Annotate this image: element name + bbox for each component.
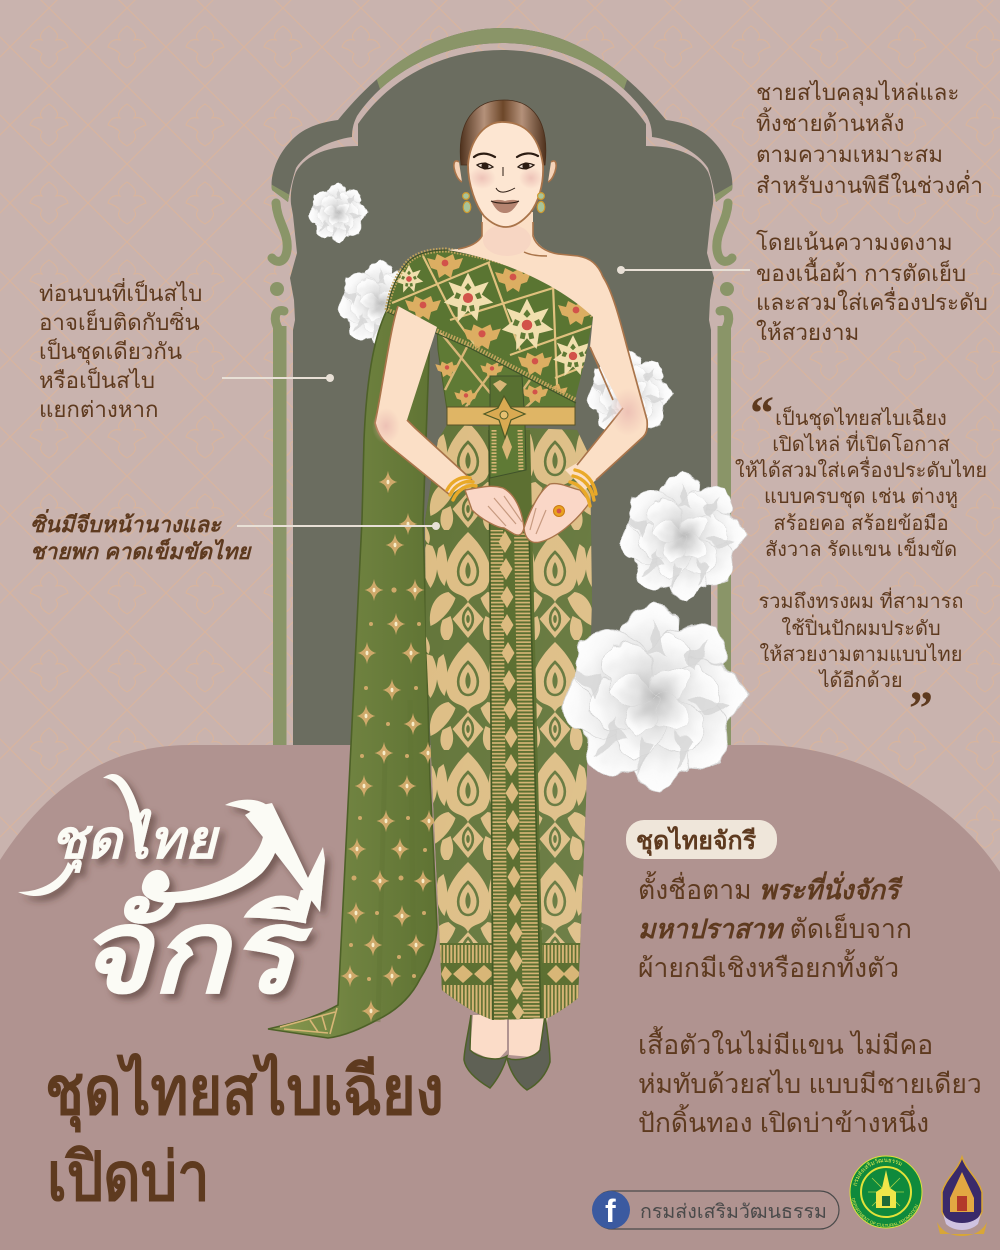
text: description: เสื้อตัวในไม่มีแขน ไม่มีคอ bbox=[638, 1026, 933, 1060]
heading: brown title bbox=[45, 1052, 444, 1215]
flower: right large bbox=[556, 604, 748, 793]
quote: ได้อีกด้วย bbox=[817, 669, 903, 692]
quote: เปิดไหล่ ที่เปิดโอกาส bbox=[772, 430, 950, 456]
lips bbox=[491, 200, 519, 213]
left arm bbox=[372, 306, 472, 495]
cape drape bbox=[268, 310, 437, 1038]
logo: royal emblem bbox=[937, 1157, 987, 1236]
text: right top callout: ทิ้งชายด้านหลัง bbox=[756, 107, 904, 136]
callout lines bbox=[222, 266, 750, 530]
text: left lower callout bbox=[30, 508, 252, 564]
legs and shoes bbox=[464, 1015, 550, 1090]
flower: right middle bbox=[616, 473, 747, 602]
sash knot panel bbox=[489, 425, 526, 478]
text: right second callout: และสวมใส่เครื่องประดับ bbox=[756, 286, 988, 315]
text: description: ปักดิ้นทอง เปิดบ่าข้างหนึ่ง bbox=[638, 1104, 929, 1138]
quote: ใช้ปิ่นปักผมประดับ bbox=[781, 614, 941, 640]
text: left upper callout bbox=[39, 278, 202, 422]
quote: สังวาล รัดแขน เข็มขัด bbox=[765, 536, 957, 561]
text: right top callout: สำหรับงานพิธีในช่วงค่ำ bbox=[756, 169, 983, 198]
text: description: ห่มทับด้วยสไบ แบบมีชายเดียว bbox=[638, 1069, 982, 1099]
text: left upper callout: แยกต่างหาก bbox=[39, 397, 159, 422]
right arm bbox=[565, 277, 647, 490]
text: left lower callout: ซิ่นมีจีบหน้านางและ bbox=[30, 508, 222, 537]
bodice bbox=[435, 327, 575, 410]
hands bbox=[465, 484, 590, 542]
cape stars bbox=[341, 471, 438, 1022]
quote: ให้สวยงามตามแบบไทย bbox=[760, 643, 962, 666]
text: description bbox=[638, 871, 982, 1138]
text: left upper callout: เป็นชุดเดียวกัน bbox=[39, 337, 182, 365]
title: script bbox=[18, 774, 325, 1018]
figure: woman in Thai dress bbox=[268, 100, 647, 1090]
text: description: ตั้งชื่อตาม พระที่นั่งจักรี bbox=[638, 871, 903, 905]
title: script: ชุดไทย bbox=[50, 808, 220, 873]
text: right second callout bbox=[756, 230, 988, 345]
skirt bbox=[420, 420, 600, 1030]
text: left upper callout: อาจเย็บติดกับซิ่น bbox=[39, 307, 200, 335]
flower: behind right arm bbox=[584, 352, 673, 439]
text: left upper callout: หรือเป็นสไบ bbox=[39, 366, 155, 393]
label pill: ชุดไทยจักรี bbox=[636, 825, 757, 857]
quote: แบบครบชุด เช่น ต่างหู bbox=[764, 486, 958, 509]
neck and shoulder bbox=[447, 212, 603, 340]
sabai: diagonal shoulder cloth bbox=[387, 250, 595, 405]
text: right top callout: ชายสไบคลุมไหล่และ bbox=[756, 80, 959, 106]
logo: department seal bbox=[850, 1156, 922, 1228]
nose bbox=[496, 167, 515, 192]
head bbox=[454, 100, 556, 227]
text: left lower callout: ชายพก คาดเข็มขัดไทย bbox=[30, 538, 252, 564]
heading: brown title: เปิดบ่า bbox=[47, 1140, 210, 1215]
text: description: ผ้ายกมีเชิงหรือยกทั้งตัว bbox=[638, 949, 899, 983]
quote: รวมถึงทรงผม ที่สามารถ bbox=[758, 587, 964, 613]
quote: “ bbox=[750, 387, 774, 440]
text: left upper callout: ท่อนบนที่เป็นสไบ bbox=[39, 278, 202, 306]
title: script: จักรี bbox=[76, 887, 315, 1018]
lower background panel bbox=[0, 745, 1000, 1250]
label pill bbox=[626, 820, 777, 859]
centre panel bbox=[489, 430, 544, 1030]
bangles bbox=[447, 470, 596, 506]
text: description: มหาปราสาท ตัดเย็บจาก bbox=[638, 912, 912, 944]
text: right second callout: ให้สวยงาม bbox=[756, 320, 859, 345]
facebook pill bbox=[592, 1191, 839, 1229]
flower: top left bbox=[307, 183, 368, 243]
quote: ” bbox=[909, 682, 933, 735]
flower: behind shoulder bbox=[335, 261, 424, 348]
hem border bbox=[438, 943, 583, 1023]
eyebrows and eyes bbox=[474, 153, 538, 170]
belt bbox=[447, 396, 575, 438]
quote: ให้ได้สวมใส่เครื่องประดับไทย bbox=[735, 456, 987, 482]
text: right second callout: ของเนื้อผ้า การตัดเย็บ bbox=[756, 257, 966, 286]
logo: department seal: กรมส่งเสริมวัฒนธรรม bbox=[854, 1158, 902, 1186]
quote: สร้อยคอ สร้อยข้อมือ bbox=[773, 513, 949, 535]
facebook pill: f bbox=[605, 1193, 616, 1229]
text: right top callout: ตามความเหมาะสม bbox=[756, 142, 943, 167]
text: right second callout: โดยเน้นความงดงาม bbox=[756, 230, 953, 255]
earrings bbox=[463, 193, 545, 213]
heading: brown title: ชุดไทยสไบเฉียง bbox=[45, 1052, 444, 1132]
quote bbox=[735, 387, 987, 735]
facebook pill: กรมส่งเสริมวัฒนธรรม bbox=[640, 1201, 827, 1223]
logo: department seal: DEPARTMENT OF CULTURAL PROMOTION bbox=[852, 1198, 918, 1227]
arch frame bbox=[270, 28, 734, 746]
text: right top callout bbox=[756, 80, 983, 198]
quote: เป็นชุดไทยสไบเฉียง bbox=[775, 405, 947, 431]
